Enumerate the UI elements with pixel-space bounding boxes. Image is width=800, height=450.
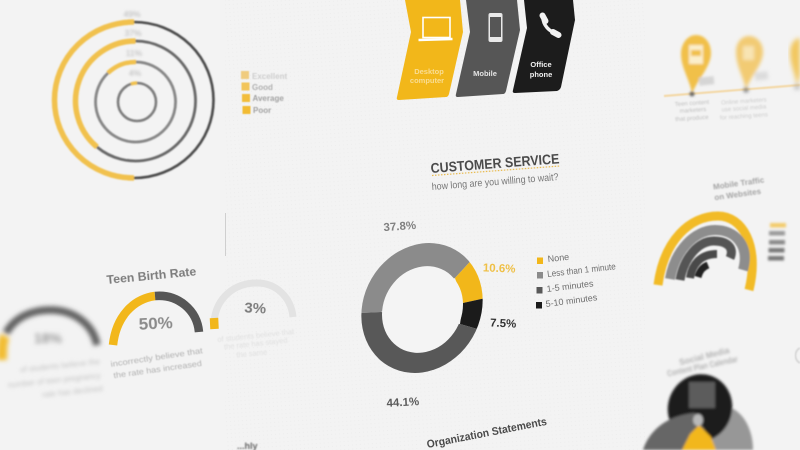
legend: mobile traffic bars — [768, 223, 786, 260]
caption: 18% gauge: of students believe the — [20, 357, 101, 374]
ring percentage labels: 49% — [123, 9, 141, 19]
gauge: 50%: 50% — [138, 313, 173, 334]
heading: customer service — [430, 150, 560, 193]
caption: 18% gauge — [7, 357, 103, 399]
legend: donut: 1-5 minutes — [546, 278, 594, 294]
divider line — [225, 213, 226, 256]
gauge: 3% — [214, 283, 293, 329]
chevron: desktop computer: computer — [410, 76, 444, 85]
ring percentage labels: 4% — [129, 68, 142, 78]
chevron: office phone: Office — [530, 60, 552, 69]
panel: device chevrons — [397, 0, 575, 100]
heading: customer service: how long are you willing to wait? — [431, 172, 559, 193]
donut percentage labels: 10.6% — [483, 262, 516, 276]
chart: venn diagram — [643, 365, 753, 450]
ring: 37% — [76, 41, 196, 161]
timeline line — [664, 85, 800, 96]
caption: 50% gauge — [110, 346, 204, 380]
legend: ring chart — [241, 71, 287, 115]
pin: timeline marker two — [736, 36, 768, 92]
chart: concentric satisfaction rings — [54, 9, 213, 178]
heading: mobile traffic: on Websites — [714, 187, 762, 202]
legend: ring chart: Good — [252, 83, 273, 92]
timeline captions: use social media — [721, 104, 767, 114]
ring percentage labels: 37% — [124, 28, 142, 38]
ring percentage labels: 11% — [126, 48, 143, 58]
legend: donut: 5-10 minutes — [545, 292, 598, 309]
heading: mobile traffic: Mobile Traffic — [712, 175, 765, 192]
caption: 3% gauge: of students believe that — [217, 327, 295, 344]
ring: 11% — [96, 62, 176, 142]
ring percentage labels — [123, 9, 143, 78]
caption: 18% gauge: number of teen pregnancy — [7, 371, 101, 390]
gauge: 50% — [113, 296, 199, 345]
heading: teen birth rate: Teen Birth Rate — [106, 264, 197, 287]
icon: smartphone — [488, 13, 502, 42]
ring: outer 49% — [54, 22, 213, 178]
caption: 3% gauge: the same — [236, 347, 268, 360]
chevron: desktop computer: Desktop — [414, 67, 444, 76]
pin: timeline marker three — [790, 38, 800, 90]
timeline captions: that produce — [675, 115, 709, 123]
caption: 3% gauge: the rate has stayed — [224, 336, 288, 351]
legend: donut: None — [547, 252, 570, 264]
gauge: 3%: 3% — [244, 299, 267, 318]
donut percentage labels: 44.1% — [386, 396, 419, 410]
timeline captions: for reaching teens — [720, 112, 768, 122]
gauge: 18% — [2, 310, 97, 360]
legend: ring chart: Average — [252, 94, 284, 103]
chart: waiting time donut — [361, 243, 483, 373]
icon: phone handset — [542, 16, 558, 35]
caption: 18% gauge: rate has declined — [42, 384, 103, 399]
chevron: desktop computer — [397, 0, 463, 100]
legend: donut — [536, 252, 616, 309]
chevron: mobile — [456, 0, 520, 97]
chart: mobile traffic nested arcs — [658, 216, 752, 290]
heading: organization statements: Organization Statements — [426, 416, 548, 450]
legend: donut: Less than 1 minute — [547, 261, 616, 279]
gauge: 18%: 18% — [34, 330, 63, 346]
caption: 50% gauge: incorrectly believe that — [110, 346, 204, 369]
timeline captions: marketers — [679, 107, 706, 115]
caption: 50% gauge: the rate has increased — [113, 359, 202, 380]
timeline captions — [675, 97, 768, 123]
heading: social media content plan: Content Plan Calendar — [666, 354, 739, 378]
pin: timeline marker one — [681, 35, 714, 96]
donut percentage labels: 7.5% — [490, 317, 517, 331]
timeline captions: Online marketers — [721, 97, 767, 107]
legend: ring chart: Excellent — [252, 72, 287, 81]
ring: 4% — [118, 83, 156, 121]
donut percentage labels: 37.8% — [383, 220, 416, 234]
donut percentage labels — [383, 220, 517, 410]
caption: 3% gauge — [217, 327, 295, 360]
heading: customer service: CUSTOMER SERVICE — [430, 150, 560, 176]
legend: ring chart: Poor — [253, 106, 271, 115]
heading: mobile traffic — [712, 175, 765, 202]
chevron: office phone — [513, 0, 575, 93]
chevron: office phone: phone — [530, 70, 552, 79]
chevron: mobile: Mobile — [473, 69, 497, 78]
heading: social media content plan: Social Media — [678, 345, 731, 367]
timeline captions: Teen content — [675, 100, 710, 108]
icon: laptop — [418, 18, 452, 40]
far-right partial ring — [795, 348, 800, 363]
